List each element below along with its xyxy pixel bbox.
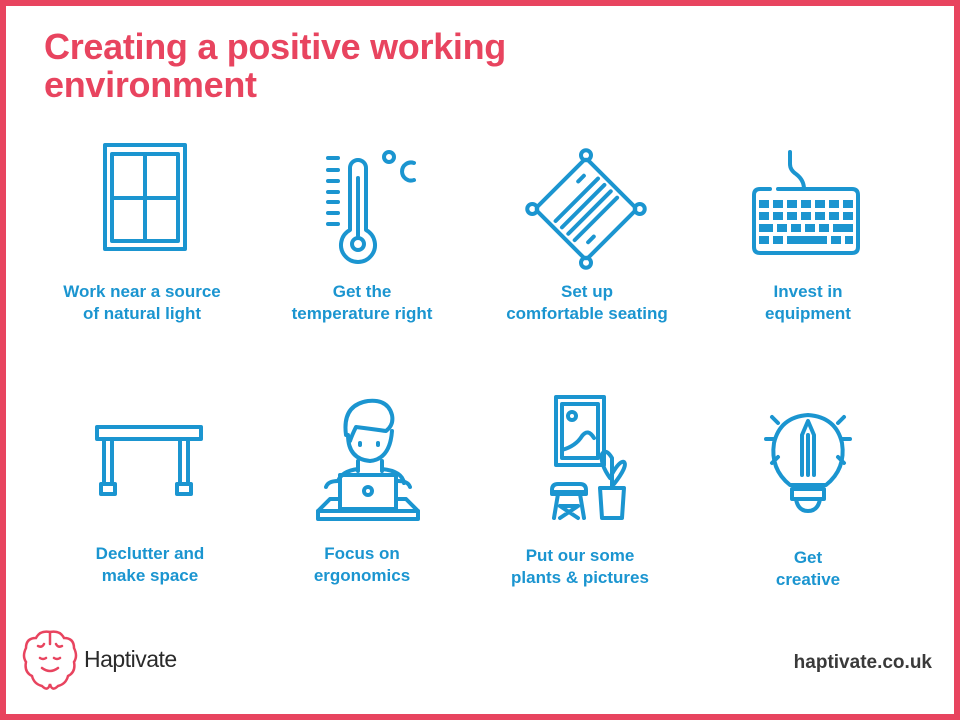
title [44, 26, 506, 105]
label: seating: comfortable seating [506, 304, 668, 323]
label: natural light: of natural light [83, 304, 201, 323]
logo text: Haptivate [84, 646, 177, 672]
icon: keyboard [752, 150, 860, 255]
label: plants & pictures [511, 546, 649, 587]
icon: cushion [525, 148, 647, 270]
icon: thermometer [326, 150, 416, 264]
label: temperature: Get the [333, 282, 391, 301]
label: ergonomics: Focus on [324, 544, 400, 563]
title: environment [44, 64, 257, 105]
label: equipment [765, 282, 851, 323]
icon: window [103, 143, 187, 251]
logo: Haptivate [22, 630, 177, 690]
website: haptivate.co.uk [794, 652, 932, 673]
label: equipment: Invest in [774, 282, 842, 301]
label: equipment: equipment [765, 304, 851, 323]
label: seating: Set up [561, 282, 613, 301]
label: ergonomics [314, 544, 410, 585]
label: natural light: Work near a source [63, 282, 221, 301]
label: declutter: Declutter and [96, 544, 204, 563]
label: ergonomics: ergonomics [314, 566, 410, 585]
label: plants & pictures: plants & pictures [511, 568, 649, 587]
label: temperature: temperature right [292, 304, 432, 323]
label: declutter [96, 544, 204, 585]
icon: person with laptop [316, 398, 420, 521]
icon: brain [22, 630, 78, 690]
icon: table [95, 425, 203, 496]
label: creative: creative [776, 570, 840, 589]
icon: picture, stool, plant [550, 395, 627, 520]
label: natural light [63, 282, 221, 323]
label: plants & pictures: Put our some [526, 546, 634, 565]
label: creative [776, 548, 840, 589]
label: creative: Get [794, 548, 822, 567]
label: seating [506, 282, 668, 323]
label: temperature [292, 282, 432, 323]
icon: bulb with pencil [764, 413, 852, 513]
label: declutter: make space [102, 566, 198, 585]
title: Creating a positive working [44, 26, 506, 67]
